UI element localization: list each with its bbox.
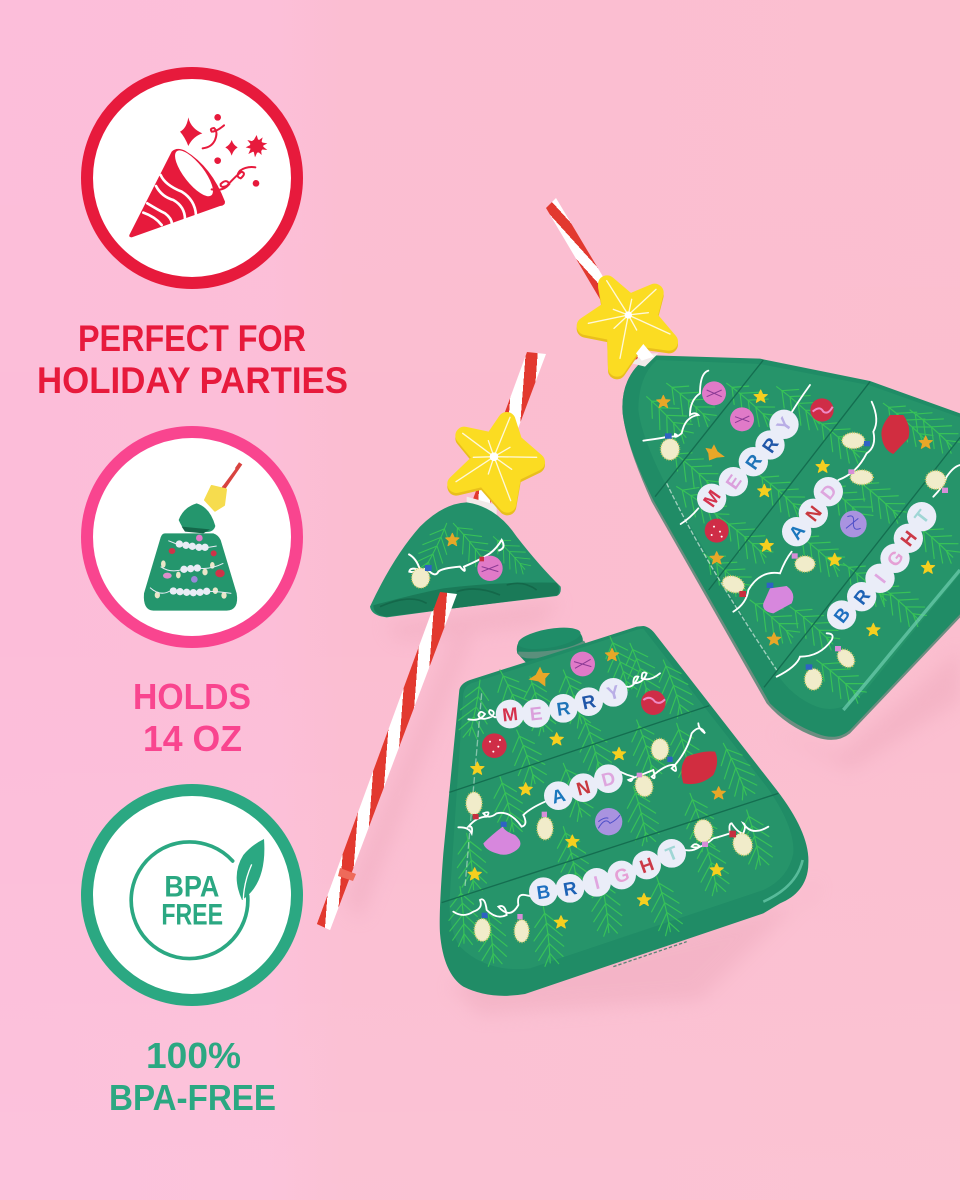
text: merry beads: Y — [605, 681, 623, 704]
text: bright beads: B — [829, 603, 854, 627]
straw: lower part in front of dome — [317, 592, 457, 930]
icon: party popper badge — [87, 73, 297, 283]
text: bright beads: R — [562, 877, 579, 900]
text: merry beads: R — [555, 697, 572, 720]
text: merry beads: R — [741, 450, 766, 473]
text: merry beads: Y — [772, 413, 797, 436]
shadows under products — [345, 600, 960, 1015]
label: holds 14 oz — [133, 676, 251, 759]
icon: BPA free badge — [87, 790, 297, 1000]
text: merry beads: R — [580, 690, 598, 714]
cap: tree top dome — [370, 502, 561, 617]
text: bright beads: H — [896, 527, 921, 550]
text: and beads: N — [574, 776, 593, 800]
text: bright beads — [827, 502, 936, 630]
text: bright beads — [529, 839, 686, 906]
label: 100% BPA-free: BPA-FREE — [109, 1077, 276, 1118]
bottle: back tree — [622, 355, 960, 740]
icon: BPA free badge: FREE — [161, 898, 223, 931]
text: bright beads: G — [882, 546, 908, 571]
straw: front bottle — [317, 352, 546, 930]
text: bright beads: H — [637, 853, 657, 877]
text: and beads: A — [784, 520, 809, 544]
label: 100% BPA-free: 100% — [146, 1035, 241, 1076]
text: and beads — [544, 764, 623, 810]
text: bright beads: T — [910, 505, 934, 528]
text: and beads: D — [816, 480, 841, 504]
heading: perfect for holiday parties: PERFECT FOR — [78, 318, 306, 359]
text: and beads — [782, 477, 843, 546]
text: bright beads: T — [663, 841, 681, 865]
star: front bottle topper — [456, 417, 537, 515]
straw: back bottle — [546, 198, 648, 360]
bottle: front tree — [440, 624, 808, 996]
text: bright beads: R — [849, 585, 875, 609]
text: merry beads: E — [721, 471, 746, 493]
star: back bottle topper — [586, 281, 670, 370]
text: bright beads: G — [612, 863, 632, 887]
text: merry beads: M — [501, 703, 519, 725]
icon: bottle badge — [87, 432, 297, 642]
label: 100% BPA-free — [109, 1035, 276, 1118]
text: bright beads: I — [870, 570, 890, 587]
text: merry beads: E — [529, 702, 543, 725]
text: bright beads: I — [592, 872, 602, 893]
text: merry beads: R — [758, 433, 783, 457]
text: bright beads: B — [535, 880, 551, 903]
heading: perfect for holiday parties — [37, 318, 348, 401]
heading: perfect for holiday parties: HOLIDAY PARTIES — [37, 360, 348, 401]
text: merry beads — [697, 410, 799, 513]
icon: BPA free badge: BPA — [164, 870, 219, 903]
text: merry beads: M — [699, 486, 725, 511]
label: holds 14 oz: HOLDS — [133, 676, 251, 717]
text: and beads: N — [801, 502, 826, 525]
text: and beads: D — [599, 767, 618, 791]
label: holds 14 oz: 14 OZ — [143, 718, 242, 759]
text: and beads: A — [549, 784, 568, 808]
text: merry beads — [496, 678, 628, 728]
